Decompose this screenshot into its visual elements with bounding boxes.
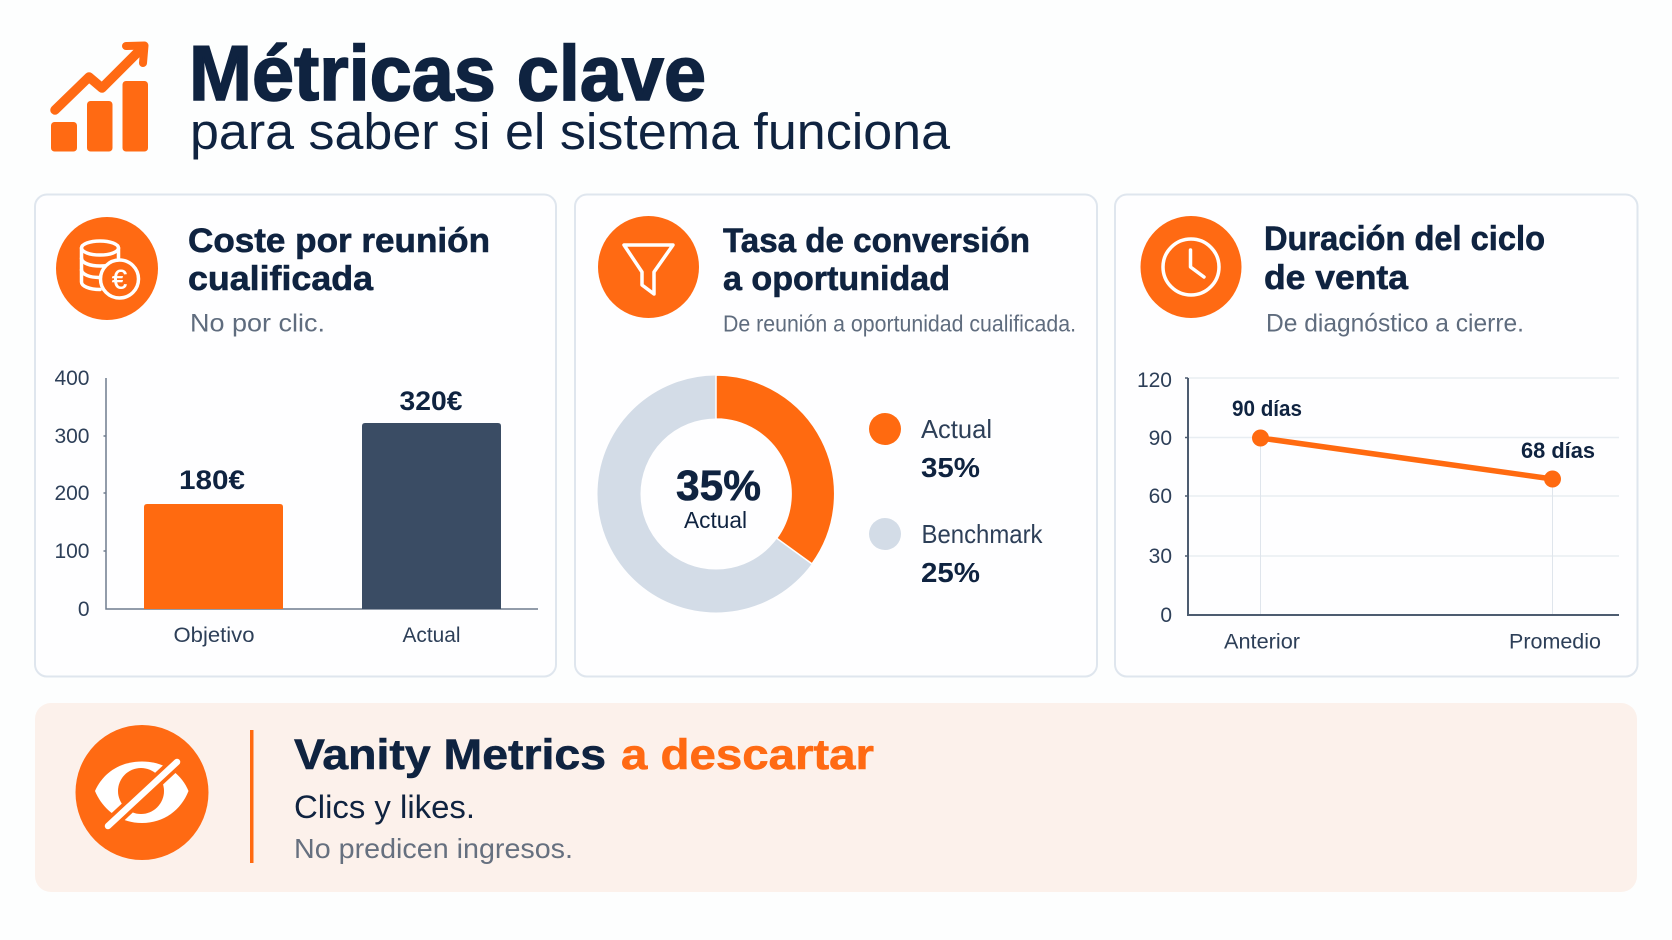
- bar: objetivo: [144, 504, 283, 609]
- line chart: 0: [1160, 604, 1172, 627]
- text: clics y likes: Clics y likes.: [294, 789, 475, 825]
- line chart: 120: [1137, 369, 1172, 392]
- icon: crossed eye: [76, 725, 208, 860]
- bar chart: 100: [54, 540, 90, 563]
- icon: coins: €: [112, 264, 127, 294]
- heading: Coste por reunión: [188, 222, 490, 260]
- donut chart: 35%: [676, 462, 761, 510]
- heading: Vanity Metrics: [294, 731, 606, 779]
- legend: actual: 35%: [921, 452, 980, 483]
- heading line 2: cualificada: [188, 260, 374, 298]
- heading: [294, 731, 874, 779]
- legend: actual: Actual: [921, 414, 992, 444]
- donut chart: Actual: [684, 507, 747, 533]
- bar chart: 180€: [179, 465, 245, 495]
- panel: tasa de conversión: [575, 194, 1097, 676]
- text: no predicen ingresos: No predicen ingresos.: [294, 833, 573, 864]
- heading line 2: de venta: [1264, 259, 1409, 297]
- line chart: 30: [1149, 545, 1172, 568]
- bar chart: 320€: [400, 386, 462, 416]
- legend: benchmark: 25%: [921, 557, 980, 588]
- icon: coins: [56, 217, 158, 320]
- icon: funnel: [598, 216, 699, 318]
- line chart: 90: [1149, 427, 1172, 450]
- heading line 2: a oportunidad: [723, 260, 950, 298]
- bar chart: 300: [54, 425, 90, 448]
- title: Métricas clave: [189, 29, 706, 117]
- title: [189, 29, 951, 160]
- line chart: 90 días: [1232, 396, 1302, 421]
- line chart: 60: [1149, 485, 1172, 508]
- bar chart: 400: [54, 367, 90, 390]
- line chart: Anterior: [1224, 630, 1300, 654]
- divider: [250, 730, 254, 863]
- legend: actual: [869, 413, 992, 483]
- line chart: [1137, 369, 1619, 654]
- heading: Tasa de conversión: [723, 222, 1030, 260]
- panel: coste por reunión: [35, 194, 556, 676]
- description: De reunión a oportunidad cualificada.: [723, 310, 1076, 336]
- description: No por clic.: [190, 310, 325, 338]
- bar chart: 200: [54, 482, 90, 505]
- icon: growth chart: [51, 46, 148, 152]
- icon: clock: [1140, 216, 1242, 318]
- line chart: 68 días: [1521, 438, 1595, 463]
- description: De diagnóstico a cierre.: [1266, 310, 1524, 338]
- panel: vanity metrics: [35, 703, 1637, 892]
- donut chart: [619, 375, 835, 591]
- subtitle: para saber si el sistema funciona: [190, 103, 951, 160]
- legend: benchmark: [869, 518, 1043, 588]
- bar chart: Objetivo: [174, 624, 254, 647]
- bar chart: 0: [78, 598, 90, 621]
- legend: benchmark: Benchmark: [922, 519, 1043, 549]
- heading: Duración del ciclo: [1264, 220, 1545, 258]
- heading: a descartar: [621, 731, 874, 779]
- bar chart: Actual: [402, 624, 460, 647]
- bar: actual: [362, 423, 501, 609]
- line chart: Promedio: [1509, 630, 1601, 654]
- panel: duración del ciclo: [1115, 194, 1638, 676]
- bar chart: [54, 367, 538, 647]
